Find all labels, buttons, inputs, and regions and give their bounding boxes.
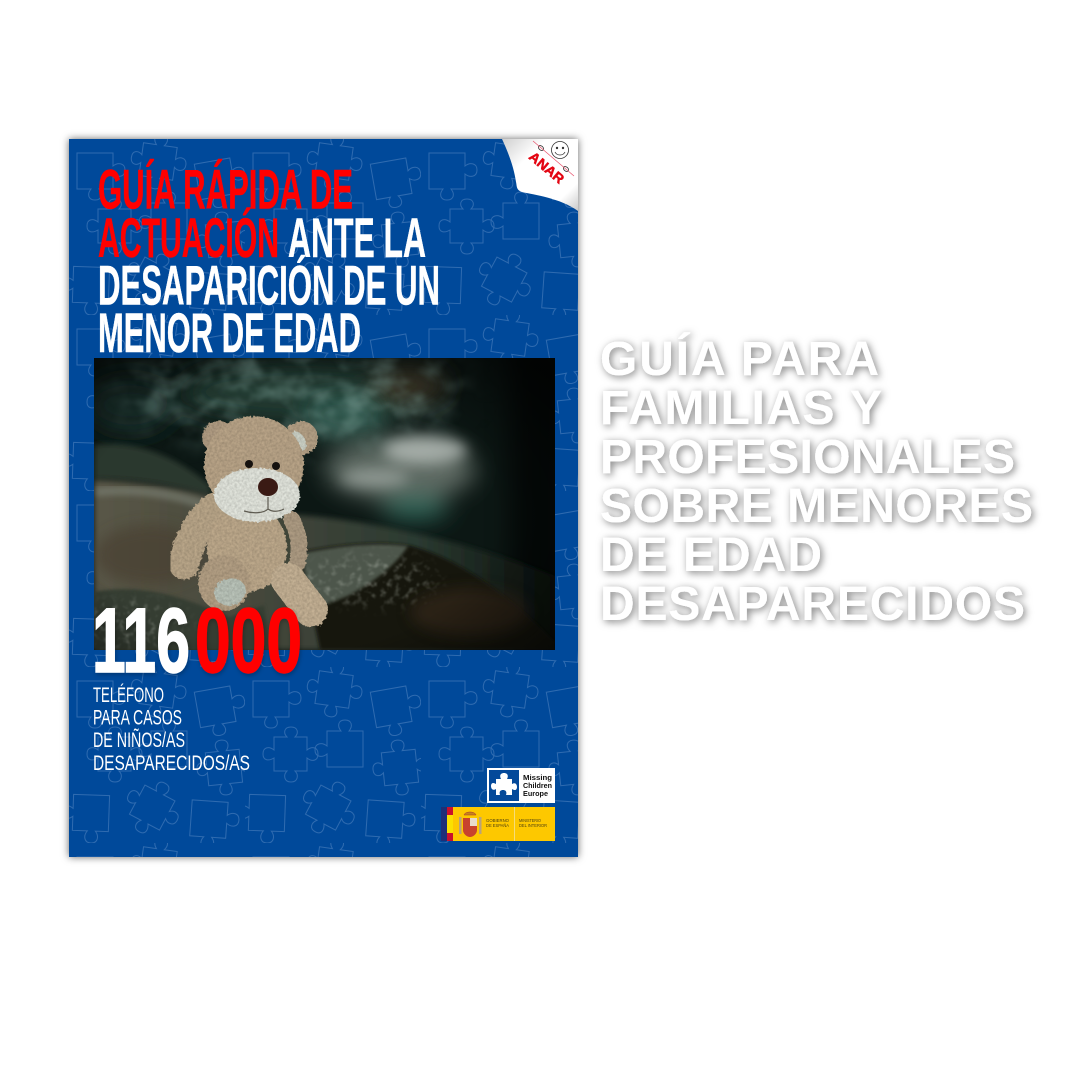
logo: Gobierno de España [441, 807, 555, 841]
cover title: ACTUACIÓN [98, 206, 279, 269]
teddy bear [184, 416, 318, 611]
photo vignette [94, 358, 555, 650]
heading: guide description: GUÍA PARA [600, 332, 879, 386]
logo text: Missing [523, 775, 552, 782]
helpline number: 116 [92, 590, 190, 692]
panel: guide cover [69, 139, 578, 857]
ministry text: GOBIERNO [486, 818, 510, 823]
ANAR wordmark: ANAR [526, 149, 567, 187]
helpline description: TELÉFONO [93, 684, 164, 707]
heading: guide description: DESAPARECIDOS [600, 578, 1025, 631]
heading: guide description: PROFESIONALES [600, 431, 1015, 484]
foliage background [85, 362, 475, 520]
ministry text [486, 818, 547, 828]
helpline number: 000 [195, 590, 302, 692]
cover title: DESAPARICIÓN DE UN [98, 254, 440, 316]
logo: Missing Children Europe [487, 768, 555, 803]
ground [94, 480, 555, 650]
logo text: Children [523, 783, 552, 790]
infographic canvas [63, 133, 1038, 863]
ministry text: DE ESPAÑA [486, 823, 509, 828]
cover title [98, 158, 440, 364]
cover title: ANTE LA [288, 206, 426, 269]
mist [341, 436, 467, 487]
page curl with ANAR logo [502, 139, 578, 211]
cover title: MENOR DE EDAD [98, 301, 361, 364]
heading: guide description: FAMILIAS Y [600, 382, 882, 435]
heading: guide description [600, 332, 1033, 631]
photo: teddy bear on a rock [94, 358, 555, 650]
heading: guide description: DE EDAD [600, 529, 822, 582]
rock front [302, 542, 504, 650]
logo text: Europe [523, 791, 548, 798]
icon: white puzzle piece [491, 773, 517, 795]
cover title: GUÍA RÁPIDA DE [98, 158, 353, 220]
icon: ANAR smiley [537, 142, 570, 172]
helpline description [93, 684, 250, 775]
helpline description: DE NIÑOS/AS [93, 728, 185, 752]
ledge [94, 444, 212, 495]
heading: guide description: SOBRE MENORES [600, 480, 1033, 533]
helpline description: PARA CASOS [93, 706, 182, 730]
ministry text: MINISTERIO [519, 818, 542, 823]
ministry text: DEL INTERIOR [519, 823, 547, 828]
logo text [523, 775, 552, 798]
helpline description: DESAPARECIDOS/AS [93, 752, 250, 775]
cover background with puzzle pattern [69, 139, 578, 857]
icon: coat of arms [459, 812, 482, 837]
